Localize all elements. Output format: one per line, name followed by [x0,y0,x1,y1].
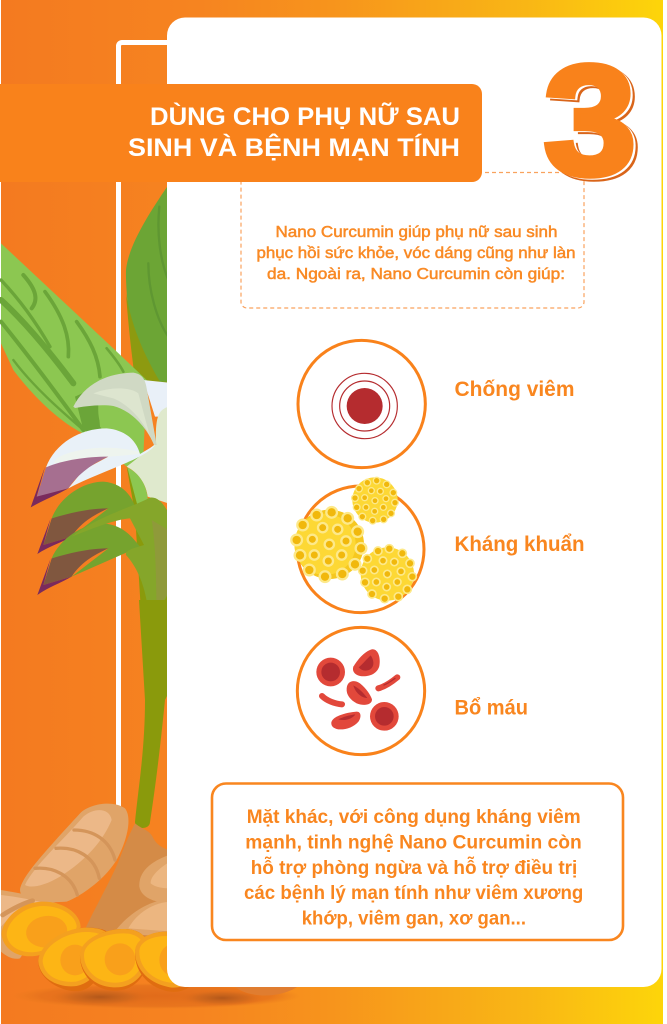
tepal two brown tip [43,548,108,585]
left rhizome ridge [3,901,33,915]
icon: antibacterial [291,477,424,613]
icon: anti-inflammation [298,340,425,468]
back leaf shaded edge [126,293,168,388]
flat cell right [378,677,397,688]
white back petal [143,380,168,417]
dashed intro box [241,172,584,308]
lower right bacteria [359,545,416,603]
light green leaf by stem [127,467,148,505]
upper petal highlight [93,388,150,437]
callout text: các bệnh lý mạn tính như viêm xương [244,882,583,904]
upper left rhizome [20,804,128,902]
round cell left [316,658,345,686]
slice one [2,902,81,956]
purple tip dark [31,467,68,507]
left rhizome [1,890,57,959]
bract lighter side [152,520,168,610]
left rhizome highlight [1,895,43,927]
rhizome under card edge [233,985,300,996]
dark patch behind petal [75,387,113,443]
right lump [139,853,173,903]
icon: blood cells [297,627,425,755]
big bacteria [291,507,366,582]
purple tip light [37,457,108,497]
main rhizome body [82,823,173,937]
bottom callout box [212,784,623,940]
upper pale petal [73,373,157,445]
big light green leaf [1,243,147,467]
light leaf centre [98,405,142,467]
flower centre [127,407,168,503]
round cell right [370,702,399,731]
lower lump highlight [128,902,173,932]
title banner [0,84,482,182]
lower lump [113,898,173,937]
kidney cell top [353,649,380,676]
upper rhizome highlight [25,810,112,887]
petal pale band [53,448,140,463]
ground shadow [12,983,300,1009]
kidney cell bottom [331,712,360,729]
tepal one brown tip [43,508,108,545]
stem fill right [137,503,168,620]
title line 1: DÙNG CHO PHỤ NỮ SAU [150,101,460,131]
green tepal one [52,482,135,537]
intro paragraph: phục hồi sức khỏe, vóc dáng cũng như làn [256,245,576,262]
label: Kháng khuẩn: Kháng khuẩn [454,533,584,556]
rhizome ridges [35,830,115,895]
big number 3: 3 [544,34,636,208]
intro paragraph: Nano Curcumin giúp phụ nữ sau sinh [276,224,558,241]
flat cell left [322,696,342,704]
green bract [72,497,168,618]
small top bacteria [352,477,398,524]
callout text: mạnh, tinh nghệ Nano Curcumin còn [245,832,582,854]
stem [127,467,168,623]
tepal two purple edge [37,558,72,595]
intro paragraph [256,224,576,283]
slice three [80,929,149,991]
label: Bổ máu: Bổ máu [454,696,528,720]
big number 3: 3 [548,37,641,211]
right lump highlight [151,860,173,888]
callout text: Mặt khác, với công dụng kháng viêm [247,806,581,828]
white frame line [118,42,180,815]
big leaf veins [1,275,123,430]
callout text [244,806,583,930]
callout text: khớp, viêm gan, xơ gan... [302,908,526,930]
back leaf veins [148,207,168,337]
stem lower part [135,600,170,828]
green tepal two [52,523,140,577]
slice two [38,928,110,991]
title line 2: SINH VÀ BỆNH MẠN TÍNH [128,132,460,162]
white content card [167,18,662,987]
intro paragraph: da. Ngoài ra, Nano Curcumin còn giúp: [267,266,565,283]
tepal one purple edge [37,518,72,554]
back dark leaf [126,185,168,387]
callout text: hỗ trợ phòng ngừa và hỗ trợ điều trị [251,855,577,879]
plant illustration: leaves and flower [1,185,168,623]
slice four [135,932,200,992]
turmeric rhizomes and slices [1,804,200,992]
big number 3: 3 [546,35,639,209]
kidney cell centre [347,681,372,705]
lower white petal [46,428,155,488]
label: Chống viêm: Chống viêm [454,378,574,401]
